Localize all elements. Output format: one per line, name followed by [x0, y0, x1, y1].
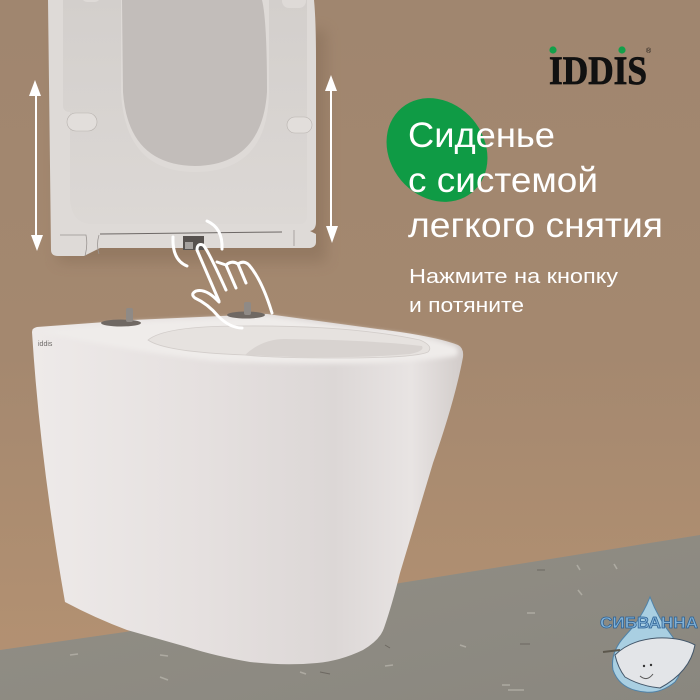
bath face [640, 664, 653, 679]
seat shadow [58, 30, 326, 262]
bumper right top [282, 0, 306, 8]
left fixing bolt [101, 308, 141, 326]
subheading: и потяните [409, 295, 524, 317]
bowl inner shadow [245, 339, 422, 357]
bumper right middle [287, 117, 312, 133]
heading: легкого снятия [408, 206, 663, 245]
seat recess [63, 0, 307, 224]
seat opening [122, 0, 267, 166]
faucet [603, 650, 620, 652]
green blob [366, 78, 508, 222]
bumper left top [82, 0, 100, 2]
heading: с системой [408, 161, 598, 200]
subheading: Нажмите на кнопку [409, 266, 618, 288]
brand text: СИБВАННА [600, 615, 698, 632]
toilet bowl body [32, 302, 463, 664]
drop [612, 597, 682, 692]
heading [408, 116, 663, 245]
subheading [409, 266, 618, 317]
bumper left middle [67, 113, 97, 131]
right double arrow [325, 75, 338, 243]
top rim highlight [36, 316, 458, 364]
seat rim around opening [121, 0, 269, 172]
floor [0, 535, 700, 700]
logo iddis: ® [646, 47, 652, 55]
watermark sibvanna [600, 597, 698, 692]
toilet seat lid [48, 0, 316, 256]
hand press icon [173, 221, 272, 328]
bath [615, 638, 695, 688]
left double arrow [29, 80, 43, 251]
bowl opening [148, 326, 430, 358]
release button [183, 236, 204, 250]
hinge strip [60, 230, 294, 256]
right fixing bolt [227, 302, 265, 318]
heading: Сиденье [408, 116, 555, 155]
logo iddis: IDDIS [549, 48, 647, 93]
brand mark on bowl: iddis [38, 341, 53, 348]
